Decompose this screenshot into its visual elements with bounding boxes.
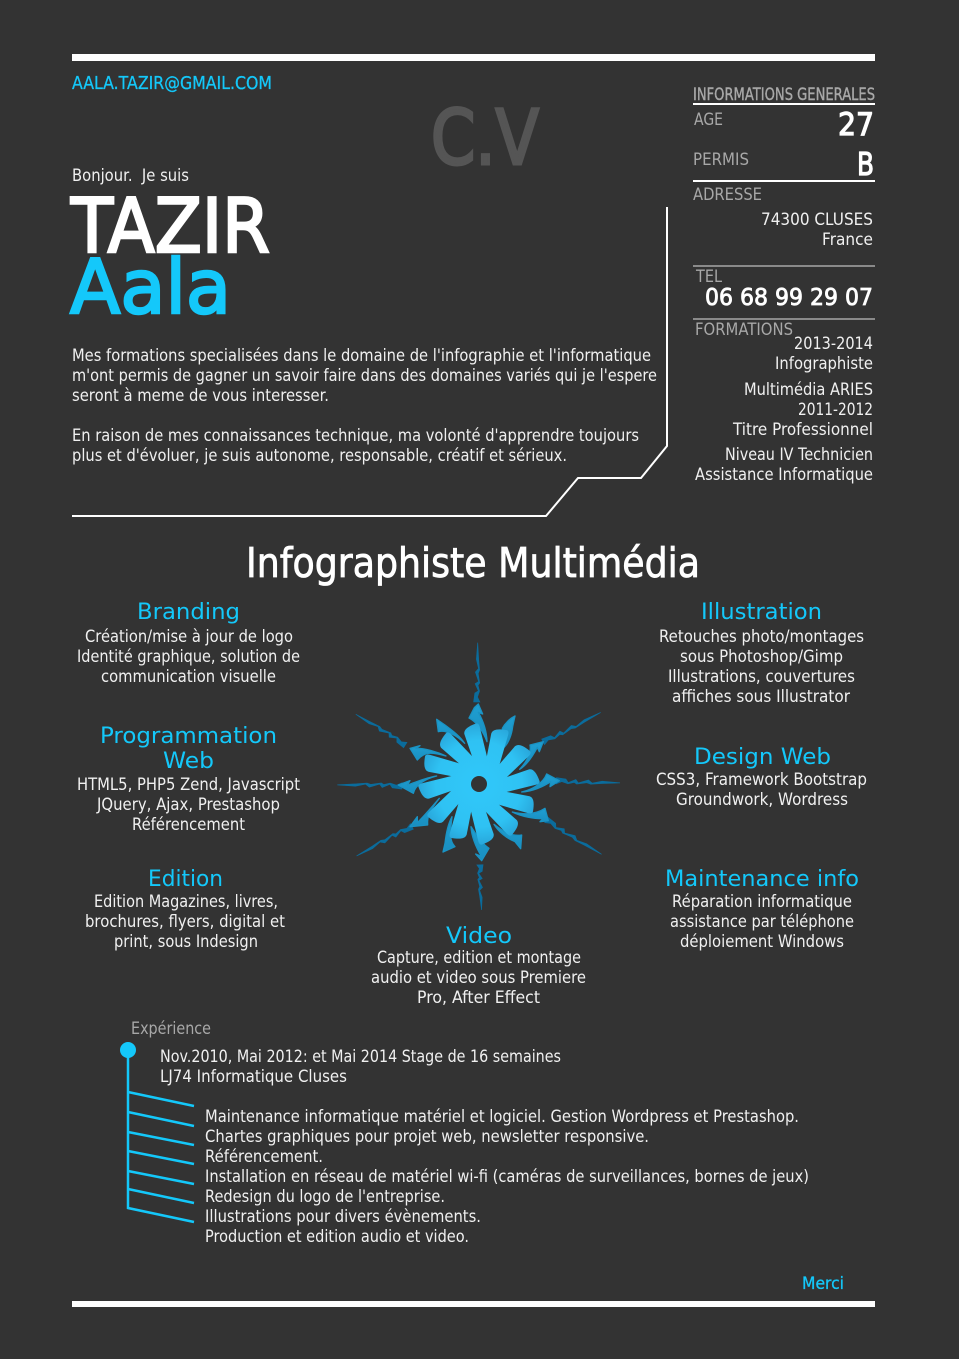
skill: video: audio et video sous Premiere — [371, 968, 586, 987]
name: first name: Aala — [70, 243, 231, 331]
top bar — [72, 54, 875, 61]
skill: maintenance: Réparation informatique — [672, 892, 852, 911]
panel: general information: 06 68 99 29 07 — [705, 285, 873, 311]
panel: general information — [693, 85, 875, 484]
skill: maintenance: déploiement Windows — [680, 932, 844, 951]
skill: illustration: affiches sous Illustrator — [672, 687, 850, 706]
intro text: seront à meme de vous interesser. — [72, 386, 329, 405]
intro text: En raison de mes connaissances technique, ma volonté d'apprendre toujours — [72, 426, 639, 445]
skill: illustration: sous Photoshop/Gimp — [680, 647, 843, 666]
panel: general information: Infographiste — [775, 354, 873, 373]
skill: video: Video — [446, 924, 512, 949]
intro frame line — [72, 207, 667, 516]
bottom bar — [72, 1301, 875, 1307]
experience task list: Maintenance informatique matériel et logiciel. Gestion Wordpress et Prestashop. — [205, 1107, 799, 1126]
skill: web design: Groundwork, Wordress — [676, 790, 848, 809]
intro text: m'ont permis de gagner un savoir faire dans des domaines variés qui je l'espere — [72, 366, 657, 385]
skill: branding: Branding — [137, 600, 240, 625]
heading: general information: INFORMATIONS GENERALES — [693, 85, 875, 104]
skill: web design: CSS3, Framework Bootstrap — [656, 770, 867, 789]
experience dates and employer — [160, 1047, 561, 1086]
greeting: Bonjour. Je suis — [72, 166, 189, 185]
skill: edition: print, sous Indesign — [114, 932, 258, 951]
C.V watermark: C.V — [431, 93, 539, 182]
skill: maintenance: Maintenance info — [665, 867, 859, 892]
skill: illustration: Retouches photo/montages — [659, 627, 864, 646]
skill: illustration: Illustrations, couvertures — [668, 667, 855, 686]
panel: general information: 2011-2012 — [798, 400, 873, 419]
skill: branding — [77, 600, 300, 686]
skill: video: Capture, edition et montage — [377, 948, 581, 967]
skill: video — [371, 924, 586, 1007]
skill: branding: communication visuelle — [101, 667, 276, 686]
skill: web programming: JQuery, Ajax, Prestashop — [96, 795, 280, 814]
experience task list: Production et edition audio et video. — [205, 1227, 469, 1246]
intro text: Mes formations specialisées dans le domaine de l'infographie et l'informatique — [72, 346, 651, 365]
panel: general information: 27 — [838, 107, 874, 143]
panel: general information: Niveau IV Technicien — [725, 445, 873, 464]
panel: general information: Multimédia ARIES — [744, 380, 873, 399]
panel: general information: PERMIS — [693, 150, 749, 169]
experience task list: Redesign du logo de l'entreprise. — [205, 1187, 445, 1206]
panel: general information: Titre Professionnel — [732, 420, 873, 439]
skill: web programming — [77, 724, 300, 834]
experience task list: Chartes graphiques pour projet web, newsletter responsive. — [205, 1127, 649, 1146]
icon: blue star emblem — [337, 643, 620, 910]
email: AALA.TAZIR@GMAIL.COM — [72, 73, 272, 94]
skill: branding: Création/mise à jour de logo — [85, 627, 293, 646]
skill: web programming: Web — [163, 749, 214, 774]
experience task list: Référencement. — [205, 1147, 323, 1166]
skill: web design: Design Web — [694, 745, 831, 770]
panel: general information: France — [822, 230, 873, 249]
panel: general information: 2013-2014 — [794, 334, 873, 353]
skill: branding: Identité graphique, solution de — [77, 647, 300, 666]
skill: web design — [656, 745, 867, 809]
panel: general information: 74300 CLUSES — [761, 210, 873, 229]
experience task list: Installation en réseau de matériel wi-fi (caméras de surveillances, bornes de jeux) — [205, 1167, 809, 1186]
intro text — [72, 346, 657, 465]
main title: Infographiste Multimédia — [246, 539, 700, 587]
skill: maintenance — [665, 867, 859, 951]
intro text: plus et d'évoluer, je suis autonome, responsable, créatif et sérieux. — [72, 446, 567, 465]
panel: general information: TEL — [695, 267, 723, 286]
name: surname: TAZIR — [70, 182, 270, 270]
experience timeline graphic — [120, 1042, 194, 1222]
panel: general information: B — [857, 147, 874, 183]
experience dates and employer: Nov.2010, Mai 2012: et Mai 2014 Stage de 16 semaines — [160, 1047, 561, 1066]
panel: general information: AGE — [694, 110, 723, 129]
experience dates and employer: LJ74 Informatique Cluses — [160, 1067, 347, 1086]
skill: edition — [85, 867, 285, 951]
experience task list: Illustrations pour divers évènements. — [205, 1207, 481, 1226]
skill: maintenance: assistance par téléphone — [670, 912, 854, 931]
experience task list — [205, 1107, 809, 1246]
skill: edition: Edition Magazines, livres, — [94, 892, 278, 911]
panel: general information: ADRESSE — [693, 185, 762, 204]
skill: video: Pro, After Effect — [417, 988, 540, 1007]
closing note: Merci — [802, 1274, 844, 1294]
skill: web programming: HTML5, PHP5 Zend, Javascript — [77, 775, 300, 794]
panel: general information: Assistance Informatique — [695, 465, 873, 484]
skill: edition: brochures, flyers, digital et — [85, 912, 285, 931]
skill: illustration: Illustration — [701, 600, 822, 625]
skill: illustration — [659, 600, 864, 706]
panel: general information: FORMATIONS — [695, 320, 793, 339]
skill: web programming: Référencement — [132, 815, 245, 834]
experience heading: Expérience — [131, 1019, 211, 1038]
skill: edition: Edition — [148, 867, 223, 892]
skill: web programming: Programmation — [100, 724, 277, 749]
